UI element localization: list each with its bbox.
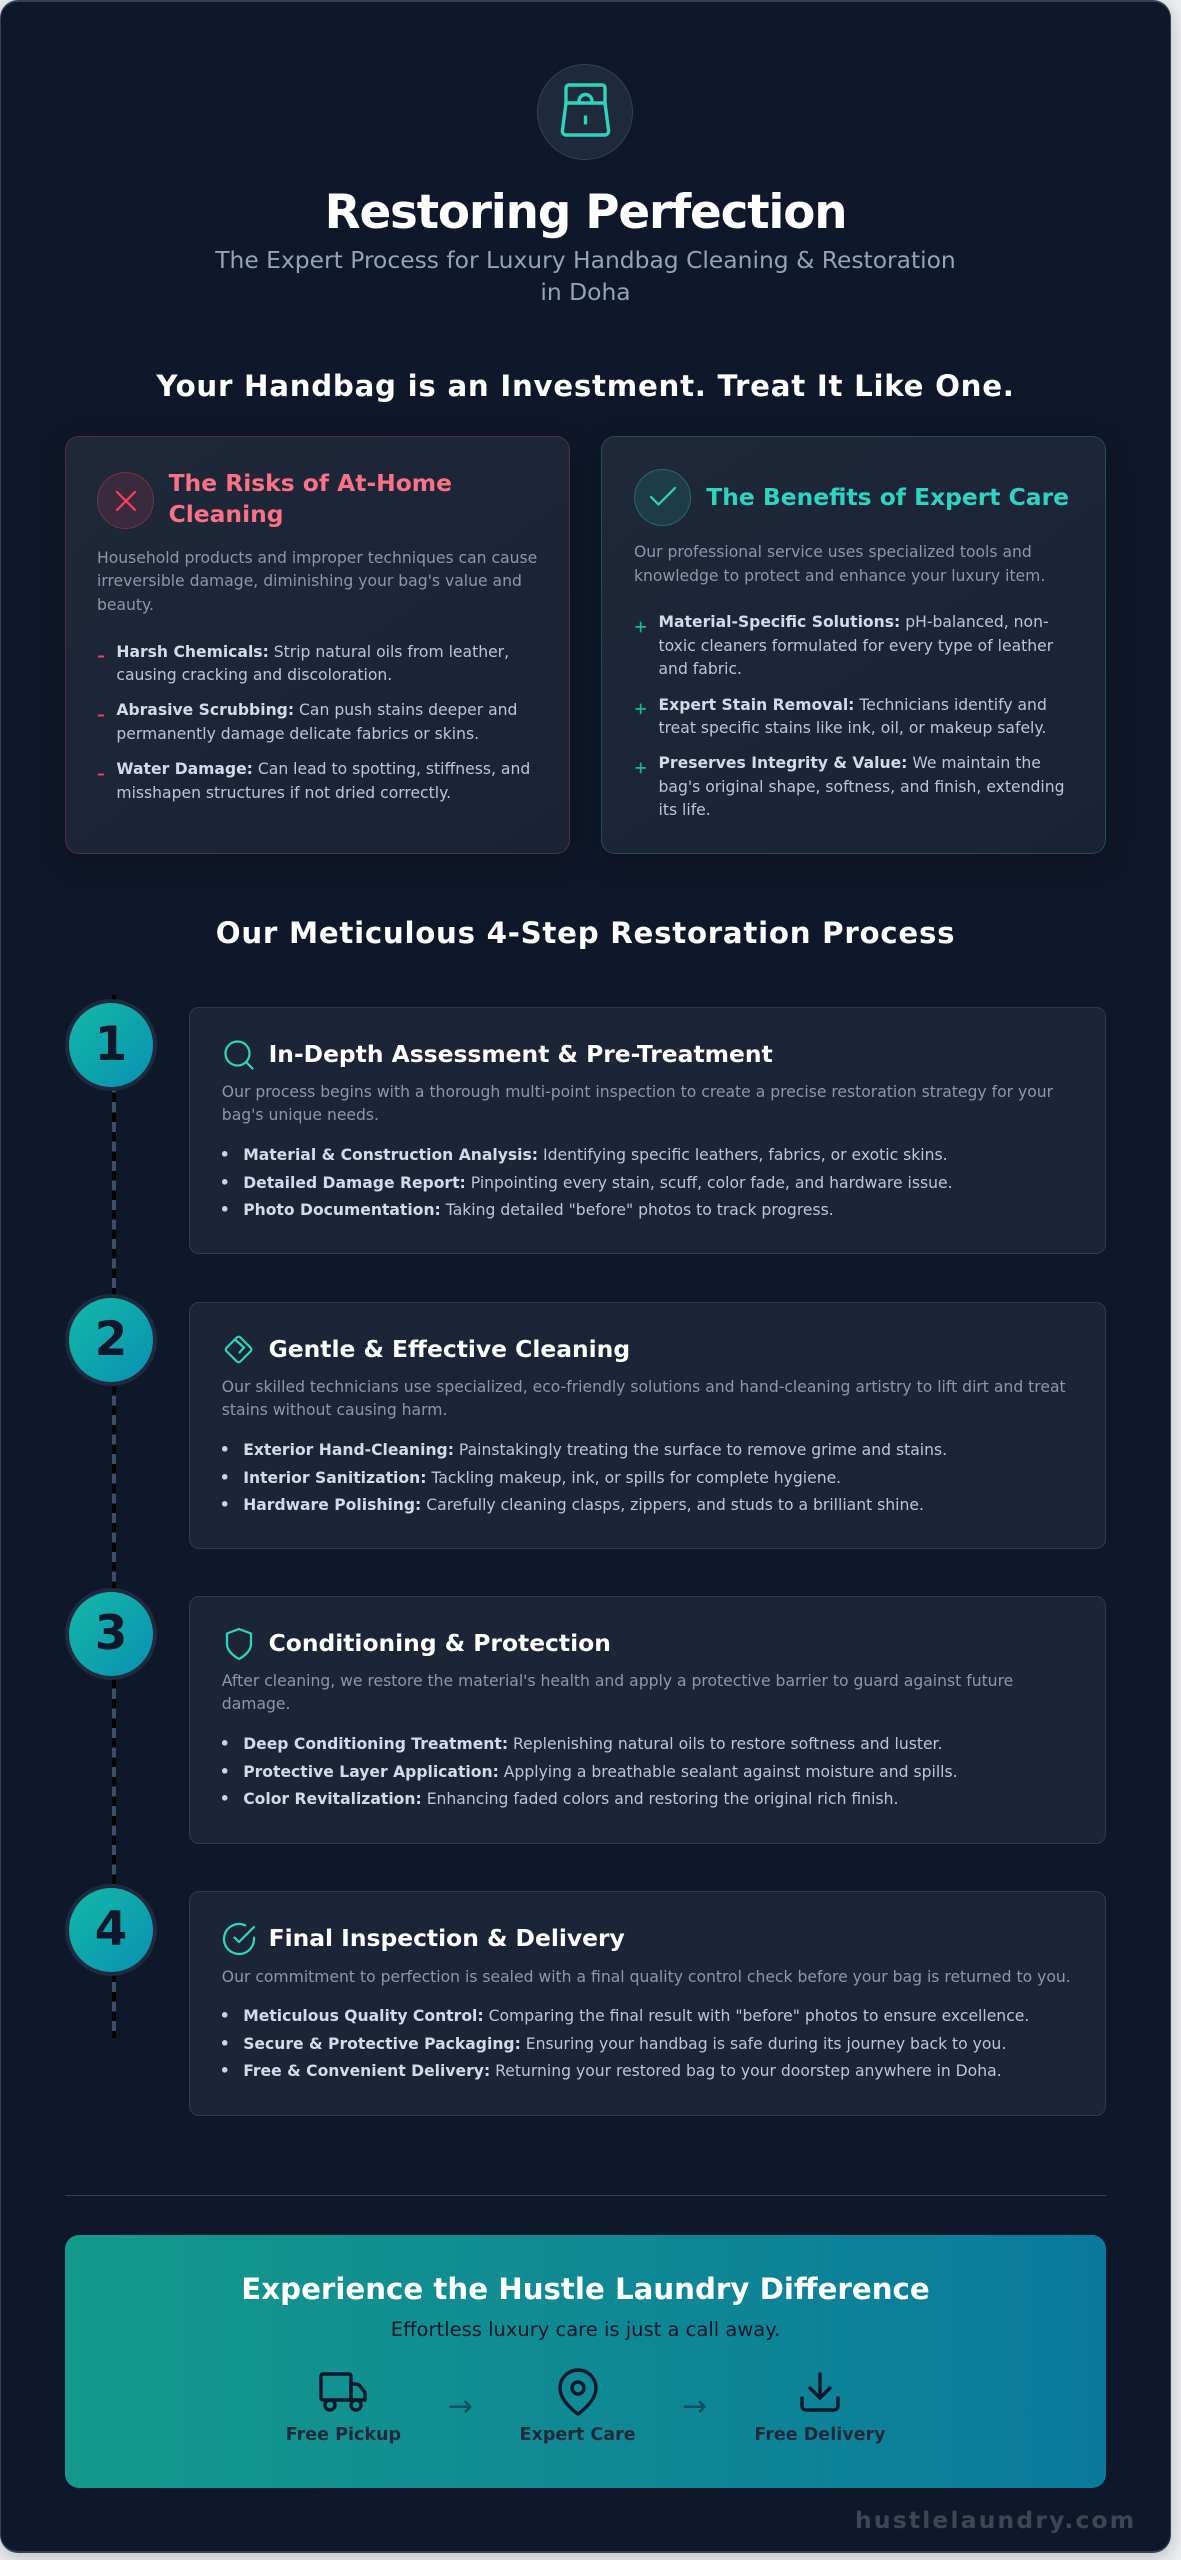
label: expert care: Expert Care	[520, 2424, 636, 2444]
icon: search	[224, 1040, 254, 1070]
step 4 title: Final Inspection & Delivery	[269, 1924, 625, 1952]
risks list: misshapen structures if not dried correctly.	[116, 784, 451, 802]
step 3 description	[222, 1672, 1013, 1713]
step 4 list: Secure & Protective Packaging: Ensuring your handbag is safe during its journey back to you.	[243, 2035, 1006, 2053]
icon: check	[634, 468, 691, 526]
subtitle: The Expert Process for Luxury Handbag Cleaning & Restoration	[215, 246, 956, 274]
risks heading	[168, 469, 452, 528]
cta subtitle: Effortless luxury care is just a call away.	[391, 2318, 780, 2341]
step number 3: 3	[95, 1607, 127, 1661]
step 4 list: Free & Convenient Delivery: Returning your restored bag to your doorstep anywhere in Doha.	[243, 2062, 1002, 2080]
step 3 list: •	[220, 1790, 230, 1808]
risks description	[97, 549, 537, 614]
step 2 list: •	[220, 1496, 230, 1514]
step 1 list: •	[220, 1201, 230, 1219]
timeline dashed line	[112, 995, 116, 2038]
step 4 list: •	[220, 2035, 230, 2053]
heading: investment: Your Handbag is an Investment. Treat It Like One.	[156, 369, 1015, 403]
benefits description	[634, 543, 1045, 585]
step 3 description: damage.	[222, 1695, 290, 1713]
risks list	[97, 642, 530, 802]
icon: cross	[97, 472, 154, 529]
step 2 description: Our skilled technicians use specialized, eco-friendly solutions and hand-cleaning artistry to lift dirt and treat	[222, 1378, 1066, 1396]
benefits description: Our professional service uses specialized tools and	[634, 543, 1032, 561]
step number 1	[65, 999, 157, 1091]
step 4 card	[189, 1891, 1106, 2116]
benefits list: Preserves Integrity & Value: We maintain the	[658, 754, 1041, 772]
risks list: Abrasive Scrubbing: Can push stains deeper and	[116, 701, 517, 719]
step 3 list: •	[220, 1763, 230, 1781]
step 1 card	[189, 1007, 1106, 1254]
label: free pickup: Free Pickup	[286, 2424, 401, 2444]
heading: 4-step process: Our Meticulous 4-Step Restoration Process	[216, 916, 955, 950]
step 1 list: Material & Construction Analysis: Identifying specific leathers, fabrics, or exotic skins.	[243, 1146, 948, 1164]
risks list: Water Damage: Can lead to spotting, stiffness, and	[116, 760, 530, 778]
benefits list: treat specific stains like ink, oil, or makeup safely.	[658, 719, 1046, 737]
risks list: Harsh Chemicals: Strip natural oils from leather,	[116, 642, 509, 660]
step 2 list: Exterior Hand-Cleaning: Painstakingly treating the surface to remove grime and stains.	[243, 1441, 947, 1459]
benefits list: +	[634, 758, 647, 777]
step 4 list: •	[220, 2062, 230, 2080]
step 3 list: Color Revitalization: Enhancing faded colors and restoring the original rich finish.	[243, 1790, 898, 1808]
step 4 list: Meticulous Quality Control: Comparing the final result with "before" photos to ensure excellence.	[243, 2007, 1029, 2025]
step 3 title: Conditioning & Protection	[269, 1629, 611, 1657]
step 1 list: Detailed Damage Report: Pinpointing every stain, scuff, color fade, and hardware issue.	[243, 1174, 953, 1192]
step 1 list: •	[220, 1174, 230, 1192]
icon: map pin	[558, 2368, 598, 2416]
step 3 list	[220, 1735, 958, 1808]
benefits heading: The Benefits of Expert Care	[706, 483, 1069, 511]
arrow 1: →	[448, 2389, 473, 2424]
icon: download	[800, 2372, 840, 2412]
step 2 list: Hardware Polishing: Carefully cleaning clasps, zippers, and studs to a brilliant shine.	[243, 1496, 924, 1514]
watermark: hustlelaundry.com	[855, 2506, 1136, 2534]
icon: check circle	[222, 1922, 256, 1956]
risks list: –	[97, 764, 105, 783]
risks heading: The Risks of At-Home	[169, 469, 452, 497]
risks list: causing cracking and discoloration.	[116, 666, 392, 684]
step 3	[65, 1588, 1106, 1844]
benefits list: and fabric.	[658, 660, 742, 678]
step 3 list: Deep Conditioning Treatment: Replenishing natural oils to restore softness and luster.	[243, 1735, 942, 1753]
step 4 description: Our commitment to perfection is sealed with a final quality control check before your bag is returned to you.	[222, 1968, 1071, 1986]
step 2 list: •	[220, 1441, 230, 1459]
step 2 description: stains without causing harm.	[222, 1401, 447, 1419]
step 3 card	[189, 1596, 1106, 1844]
step 1	[65, 999, 1106, 1254]
step 1 description: Our process begins with a thorough multi-point inspection to create a precise restoration strategy for your	[222, 1083, 1053, 1101]
subtitle: in Doha	[540, 278, 631, 306]
step 1 list	[220, 1146, 953, 1219]
step number 3	[65, 1588, 157, 1680]
icon: shield	[226, 1628, 252, 1660]
call to action panel	[65, 2235, 1106, 2488]
risks list: –	[97, 646, 105, 665]
benefits list: Material-Specific Solutions: pH-balanced, non-	[658, 613, 1049, 631]
subtitle	[215, 246, 956, 306]
step 3 list: •	[220, 1735, 230, 1753]
icon: eraser diamond	[224, 1336, 252, 1364]
step 3 description: After cleaning, we restore the material's health and apply a protective barrier to guard against future	[222, 1672, 1013, 1690]
benefits description: knowledge to protect and enhance your luxury item.	[634, 567, 1045, 585]
header icon: handbag	[537, 64, 633, 160]
step 2	[65, 1294, 1106, 1549]
risks description: beauty.	[97, 596, 154, 614]
step 1 list: Photo Documentation: Taking detailed "before" photos to track progress.	[243, 1201, 834, 1219]
step 1 description	[222, 1083, 1053, 1124]
step 4	[65, 1884, 1106, 2116]
risks heading: Cleaning	[169, 500, 284, 528]
step 2 card	[189, 1302, 1106, 1549]
step 2 list: •	[220, 1469, 230, 1487]
step 4 list	[220, 2007, 1029, 2080]
risks list: permanently damage delicate fabrics or skins.	[116, 725, 479, 743]
benefits list: +	[634, 617, 647, 636]
step number 4	[65, 1884, 157, 1976]
arrow 2: →	[682, 2389, 707, 2424]
panel: risks of at-home cleaning	[65, 436, 570, 854]
benefits list: Expert Stain Removal: Technicians identify and	[658, 696, 1047, 714]
step number 4: 4	[95, 1903, 127, 1957]
cta heading: Experience the Hustle Laundry Difference	[241, 2272, 930, 2306]
step 3 list: Protective Layer Application: Applying a breathable sealant against moisture and spills.	[243, 1763, 958, 1781]
step 4 list: •	[220, 2007, 230, 2025]
benefits list: bag's original shape, softness, and finish, extending	[658, 778, 1064, 796]
title: Restoring Perfection	[325, 186, 846, 240]
label: free delivery: Free Delivery	[754, 2424, 886, 2444]
step 1 description: bag's unique needs.	[222, 1106, 379, 1124]
step 1 title: In-Depth Assessment & Pre-Treatment	[269, 1040, 773, 1068]
step 2 title: Gentle & Effective Cleaning	[269, 1335, 630, 1363]
benefits list: toxic cleaners formulated for every type of leather	[658, 637, 1053, 655]
step 1 list: •	[220, 1146, 230, 1164]
risks description: irreversible damage, diminishing your bag's value and	[97, 572, 522, 590]
benefits list: its life.	[658, 801, 711, 819]
step number 2	[65, 1294, 157, 1386]
step number 1: 1	[95, 1018, 127, 1072]
benefits list	[634, 613, 1064, 819]
risks description: Household products and improper techniques can cause	[97, 549, 537, 567]
step 2 description	[222, 1378, 1066, 1419]
panel: benefits of expert care	[601, 436, 1106, 854]
step 2 list: Interior Sanitization: Tackling makeup, ink, or spills for complete hygiene.	[243, 1469, 841, 1487]
step number 2: 2	[95, 1313, 127, 1367]
icon: truck	[319, 2372, 367, 2412]
benefits list: +	[634, 699, 647, 718]
risks list: –	[97, 705, 105, 724]
step 2 list	[220, 1441, 947, 1514]
